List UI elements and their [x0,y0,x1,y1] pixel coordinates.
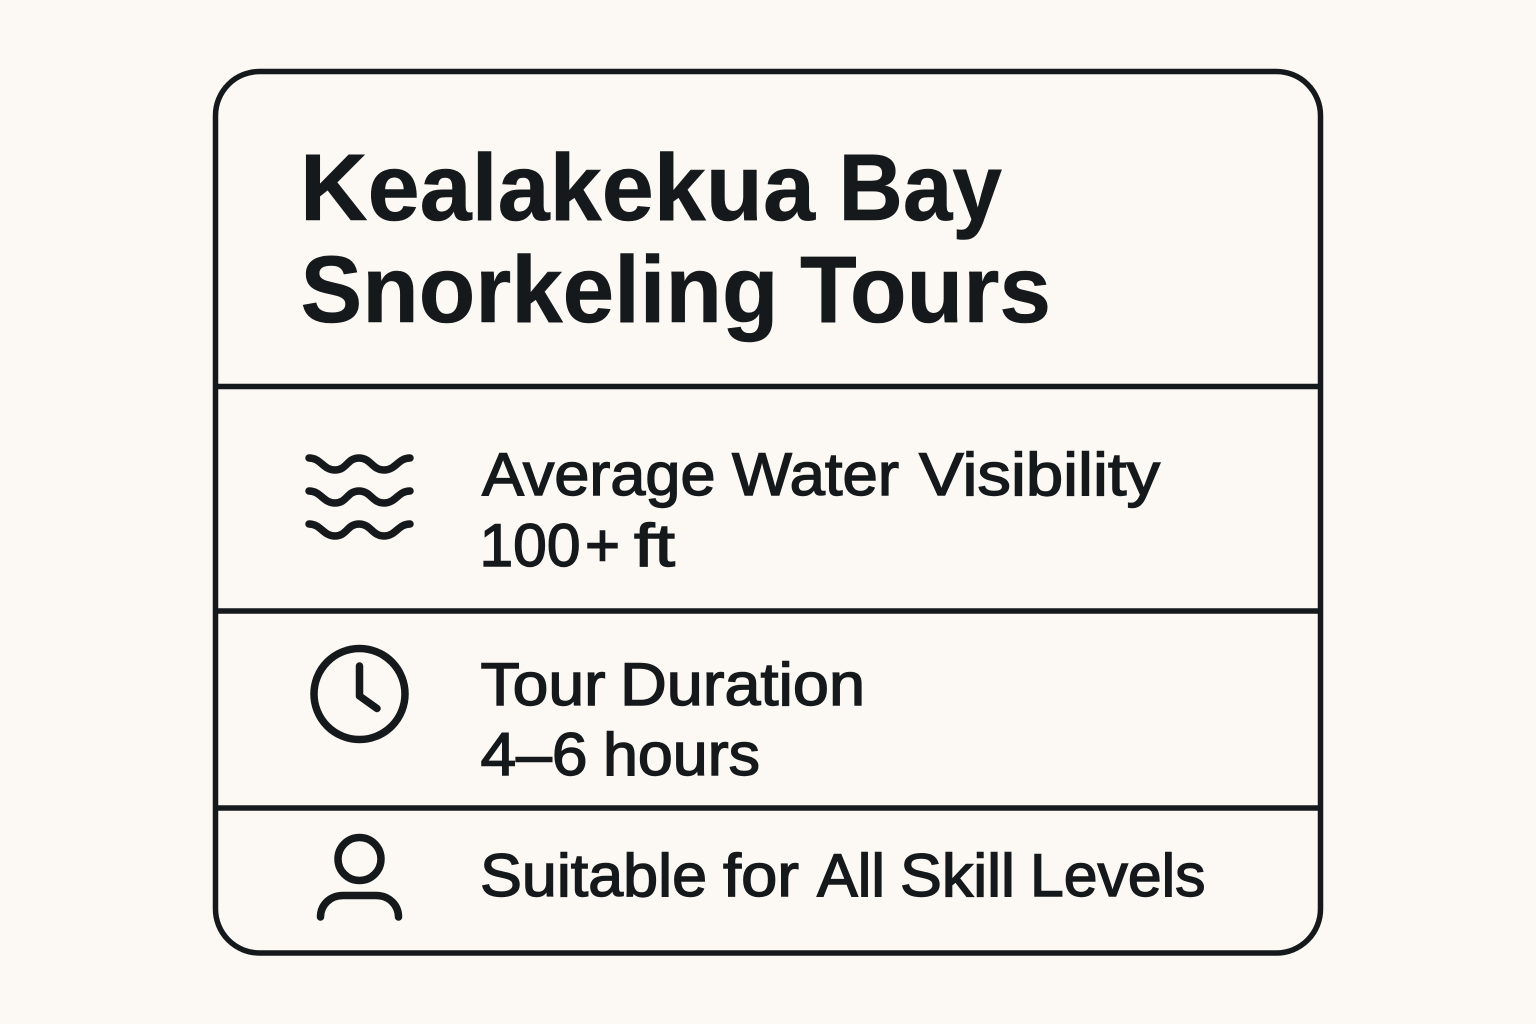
text: tour duration: hours [603,721,760,788]
text: skill levels: All [817,842,885,909]
text: tour duration: 4–6 [480,721,588,788]
text: skill levels: Skill [900,842,1015,909]
text: average water visibility: Water [732,441,899,508]
text: skill levels: for [723,842,799,909]
title: Kealakekua [300,135,816,241]
text: tour duration [480,651,865,788]
text: average water visibility [480,441,1160,579]
icon: water waves [309,458,410,536]
text: tour duration: Tour [480,651,606,718]
title: Snorkeling [300,237,778,343]
title: Bay [838,135,1002,241]
text: average water visibility: + [585,512,620,579]
panel: tour info card [215,72,1321,953]
title: Tours [800,237,1051,343]
text: skill levels: Levels [1030,842,1206,909]
title [300,135,1051,343]
text: average water visibility: ft [634,512,675,579]
text: average water visibility: Average [482,441,716,508]
icon: clock [314,648,405,740]
text: average water visibility: 100 [480,512,580,579]
text: skill levels: Suitable [480,842,707,909]
icon: person [320,838,398,917]
text: average water visibility: Visibility [919,441,1160,508]
text: tour duration: Duration [620,651,865,718]
